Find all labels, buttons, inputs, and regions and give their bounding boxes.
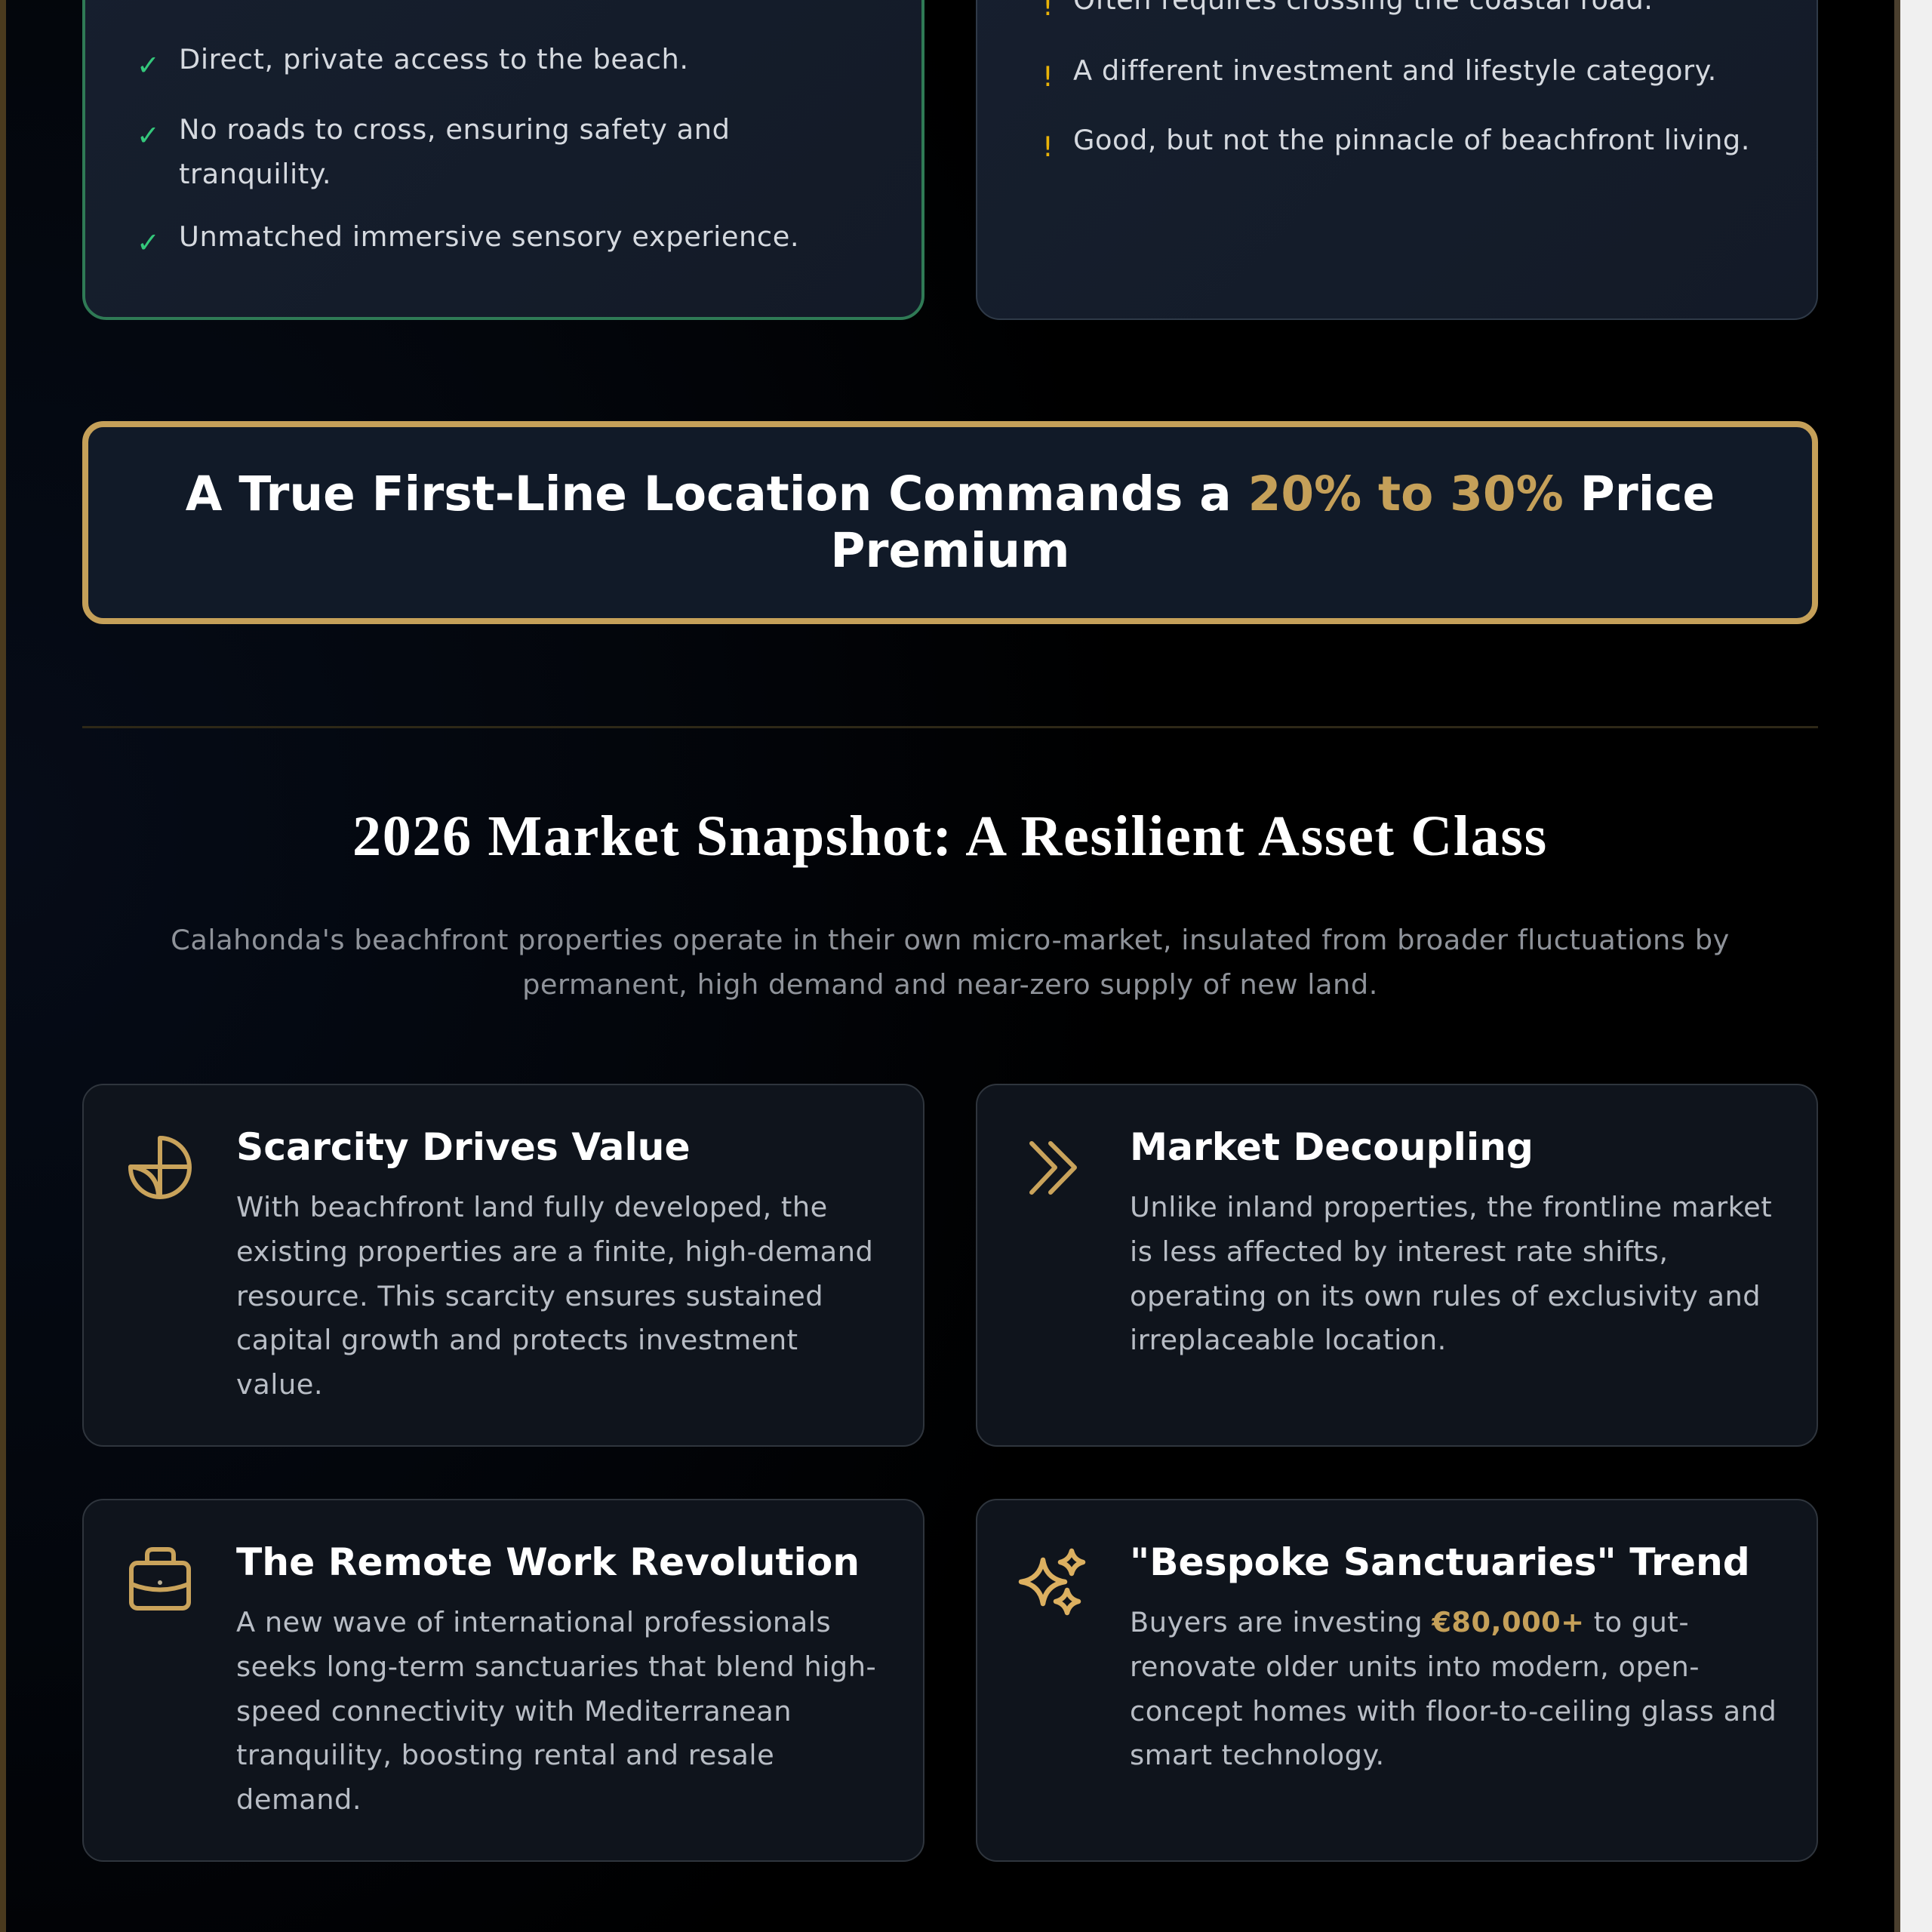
card body — [236, 1191, 873, 1401]
item: no roads: tranquility. — [179, 158, 331, 190]
callout: price premium: A True First-Line Location Commands a 20% to 30% Price — [186, 466, 1715, 521]
item: different category: A different investment and lifestyle category. — [1073, 54, 1717, 87]
card body: concept homes with floor-to-ceiling glass and — [1130, 1695, 1777, 1727]
warning mark 2: ! — [1042, 60, 1054, 93]
card body: capital growth and protects investment — [236, 1324, 798, 1356]
item: sensory experience: Unmatched immersive sensory experience. — [179, 220, 799, 253]
card body — [236, 1606, 876, 1816]
card body: smart technology. — [1130, 1739, 1385, 1771]
card body: Buyers are investing €80,000+ to gut- — [1130, 1606, 1689, 1638]
panel: scarcity drives value — [82, 1084, 924, 1447]
icon: double chevron — [1029, 1141, 1077, 1195]
card body — [1130, 1191, 1772, 1356]
card heading: Scarcity Drives Value — [236, 1124, 691, 1169]
check mark 2: ✓ — [137, 119, 160, 152]
intro text: permanent, high demand and near-zero supply of new land. — [522, 968, 1378, 1001]
card body: A new wave of international professionals — [236, 1606, 831, 1638]
panel: bespoke sanctuaries trend — [976, 1499, 1818, 1862]
check mark 1: ✓ — [137, 49, 160, 82]
panel: remote work revolution — [82, 1499, 924, 1862]
callout: price premium: Premium — [830, 523, 1070, 578]
icon: sparkles — [1019, 1549, 1085, 1615]
card body: tranquility, boosting rental and resale — [236, 1739, 774, 1771]
card body: operating on its own rules of exclusivity and — [1130, 1280, 1761, 1312]
item: no roads: No roads to cross, ensuring safety and — [179, 113, 731, 146]
card body: irreplaceable location. — [1130, 1324, 1447, 1356]
item: no roads — [179, 113, 731, 190]
card body: value. — [236, 1368, 323, 1401]
item: good not pinnacle: Good, but not the pinnacle of beachfront living. — [1073, 124, 1750, 156]
heading: market snapshot: 2026 Market Snapshot: A Resilient Asset Class — [352, 804, 1548, 868]
card heading: The Remote Work Revolution — [236, 1540, 860, 1584]
panel: first-line advantages — [82, 0, 924, 320]
intro text: Calahonda's beachfront properties operate in their own micro-market, insulated from broader fluctuations by — [171, 924, 1730, 956]
intro text — [171, 924, 1730, 1001]
icon: briefcase — [129, 1547, 191, 1611]
warning mark 3: ! — [1042, 131, 1054, 163]
card body: is less affected by interest rate shifts, — [1130, 1235, 1669, 1268]
card body: resource. This scarcity ensures sustained — [236, 1280, 823, 1312]
check mark 3: ✓ — [137, 226, 160, 259]
card body: renovate older units into modern, open- — [1130, 1651, 1700, 1683]
panel: market decoupling — [976, 1084, 1818, 1447]
item: beach access: Direct, private access to the beach. — [179, 43, 689, 75]
card body: existing properties are a finite, high-demand — [236, 1235, 873, 1268]
card body — [1130, 1606, 1777, 1771]
card body: seeks long-term sanctuaries that blend high- — [236, 1651, 876, 1683]
card heading: Market Decoupling — [1130, 1124, 1534, 1169]
card body: speed connectivity with Mediterranean — [236, 1695, 792, 1727]
card heading: "Bespoke Sanctuaries" Trend — [1130, 1540, 1750, 1584]
card body: With beachfront land fully developed, the — [236, 1191, 828, 1223]
callout: price premium — [82, 421, 1818, 624]
drawbacks list — [1042, 0, 1750, 163]
card body: demand. — [236, 1783, 361, 1816]
card body: Unlike inland properties, the frontline market — [1130, 1191, 1772, 1223]
panel: second-line comparison — [976, 0, 1818, 320]
icon: pie chart — [128, 1136, 192, 1199]
advantages list — [137, 43, 799, 259]
